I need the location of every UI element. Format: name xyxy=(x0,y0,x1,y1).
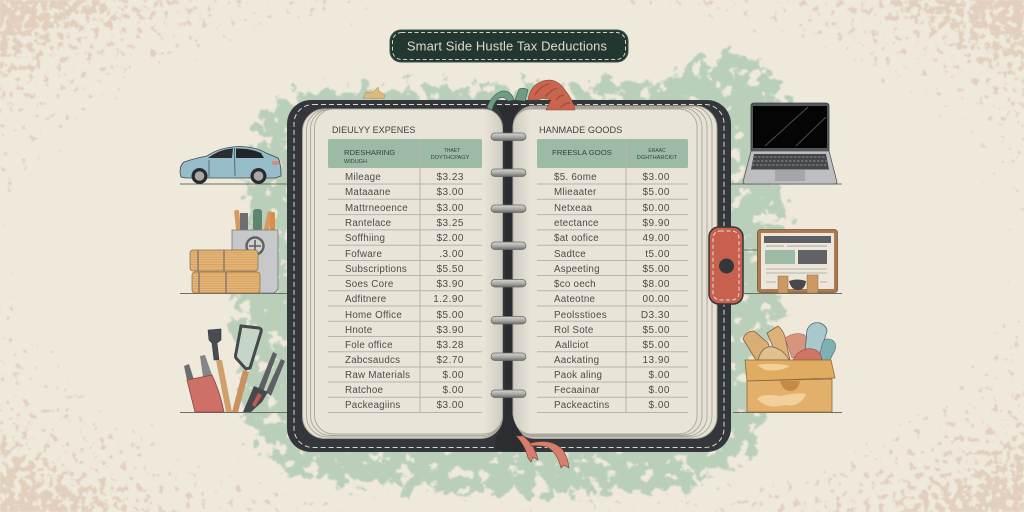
left table: daily expenses: $2.70 xyxy=(436,355,464,366)
icon: laptop xyxy=(743,103,837,184)
left table: daily expenses: Adfitnere xyxy=(345,294,387,305)
left table: daily expenses xyxy=(328,125,482,412)
left table: daily expenses: $3.25 xyxy=(436,218,464,229)
left table: daily expenses: Rantelace xyxy=(345,218,392,229)
strap clasp xyxy=(709,227,743,304)
right table: handmade goods: 00.00 xyxy=(642,294,670,305)
shelf lines xyxy=(180,184,842,412)
left table: daily expenses: $3.00 xyxy=(436,400,464,411)
left table: daily expenses: $3.00 xyxy=(436,187,464,198)
left table: daily expenses: $3.23 xyxy=(436,172,464,183)
right table: handmade goods: $at oofice xyxy=(554,233,599,244)
right page stack xyxy=(513,106,717,438)
right table: handmade goods: FREESLA GOOS xyxy=(552,148,612,157)
left table: daily expenses: Mileage xyxy=(345,172,381,183)
icon: framed website panel xyxy=(758,230,838,293)
bookmark ribbons bottom xyxy=(516,436,569,468)
left table: daily expenses: Soes Core xyxy=(345,279,394,290)
right table: handmade goods: Peolsstioes xyxy=(554,310,607,321)
left table: daily expenses: RDESHARING xyxy=(344,148,395,157)
right table: handmade goods: $8.00 xyxy=(642,279,670,290)
right table: handmade goods: $5.00 xyxy=(642,340,670,351)
notebook cover xyxy=(287,100,731,452)
left table: daily expenses: $5.00 xyxy=(436,310,464,321)
icon: tools xyxy=(184,326,285,412)
left table: daily expenses: $2.00 xyxy=(436,233,464,244)
left table: daily expenses: Hnote xyxy=(345,325,373,336)
right table: handmade goods: $co oech xyxy=(554,279,596,290)
left table: daily expenses: Home Office xyxy=(345,310,402,321)
left table: daily expenses: WIDUGH xyxy=(344,159,367,165)
right table: handmade goods: $.00 xyxy=(649,385,670,396)
left table: daily expenses: DIEULYY EXPENES xyxy=(332,125,415,135)
left table: daily expenses: Mattrneoence xyxy=(345,203,408,214)
right table: handmade goods: Packeactins xyxy=(554,400,610,411)
left table: daily expenses: THAET xyxy=(444,148,460,154)
left page stack xyxy=(302,109,502,438)
right table: handmade goods: Aspeeting xyxy=(554,264,600,275)
right table: handmade goods: Sadtce xyxy=(554,249,586,260)
left table: daily expenses: $3.90 xyxy=(436,279,464,290)
left table: daily expenses: Ratchoe xyxy=(345,385,384,396)
right table: handmade goods: $5.00 xyxy=(642,187,670,198)
binder rings xyxy=(491,133,526,398)
left table: daily expenses: Soffhiing xyxy=(345,233,385,244)
right table: handmade goods: $5.00 xyxy=(642,264,670,275)
right table: handmade goods: $0.00 xyxy=(642,203,670,214)
icon: wood bundles xyxy=(190,250,260,293)
left table: daily expenses: 1.2.90 xyxy=(433,294,464,305)
right table: handmade goods: ERAAC xyxy=(648,148,666,154)
right table: handmade goods: 13.90 xyxy=(642,355,670,366)
icon: car xyxy=(180,146,281,184)
left table: daily expenses: Subscriptions xyxy=(345,264,407,275)
left table: daily expenses: $3.90 xyxy=(436,325,464,336)
right table: handmade goods: D3.30 xyxy=(641,310,670,321)
spine xyxy=(495,106,530,452)
right table: handmade goods: Paok aling xyxy=(554,370,602,381)
right table: handmade goods: $5. 6ome xyxy=(554,172,597,183)
right table: handmade goods: $3.00 xyxy=(642,172,670,183)
left table: daily expenses: .3.00 xyxy=(439,249,464,260)
right table: handmade goods: Aallciot xyxy=(555,340,589,351)
left table: daily expenses: $5.50 xyxy=(436,264,464,275)
left table: daily expenses: $.00 xyxy=(443,385,464,396)
right table: handmade goods: DGHTHARCKIT xyxy=(637,155,678,161)
left table: daily expenses: DOYTHCPAGY xyxy=(431,155,470,161)
title banner: Smart Side Hustle Tax Deductions xyxy=(407,38,608,54)
icon: craft supply box xyxy=(743,323,836,412)
right table: handmade goods: Mlieaater xyxy=(554,187,597,198)
left table: daily expenses: Fole office xyxy=(345,340,393,351)
left table: daily expenses: Fofware xyxy=(345,249,382,260)
left table: daily expenses: Zabcsaudcs xyxy=(345,355,400,366)
right table: handmade goods: $.00 xyxy=(649,400,670,411)
left table: daily expenses: $.00 xyxy=(443,370,464,381)
right table: handmade goods: etectance xyxy=(554,218,599,229)
title banner xyxy=(390,30,628,62)
right table: handmade goods: Rol Sote xyxy=(554,325,594,336)
left table: daily expenses: Packeagiins xyxy=(345,400,401,411)
right table: handmade goods: $5.00 xyxy=(642,325,670,336)
right table: handmade goods xyxy=(537,125,688,412)
right table: handmade goods: Netxeaa xyxy=(554,203,593,214)
right table: handmade goods: 49.00 xyxy=(642,233,670,244)
notebook xyxy=(287,100,731,452)
right table: handmade goods: Fecaainar xyxy=(554,385,600,396)
right table: handmade goods: $9.90 xyxy=(642,218,670,229)
right table: handmade goods: Aateotne xyxy=(554,294,596,305)
bookmark ribbons top xyxy=(487,80,575,110)
left table: daily expenses: $3.28 xyxy=(436,340,464,351)
left table: daily expenses: Mataaane xyxy=(345,187,391,198)
right table: handmade goods: t5.00 xyxy=(645,249,670,260)
left table: daily expenses: $3.00 xyxy=(436,203,464,214)
left table: daily expenses: Raw Materials xyxy=(345,370,410,381)
green paint splash behind notebook xyxy=(225,46,793,505)
right table: handmade goods: HANMADE GOODS xyxy=(539,125,622,135)
right table: handmade goods: Aackating xyxy=(554,355,599,366)
icon: pencil cup xyxy=(232,209,278,293)
small tan ornament on cover xyxy=(363,87,385,99)
right table: handmade goods: $.00 xyxy=(649,370,670,381)
